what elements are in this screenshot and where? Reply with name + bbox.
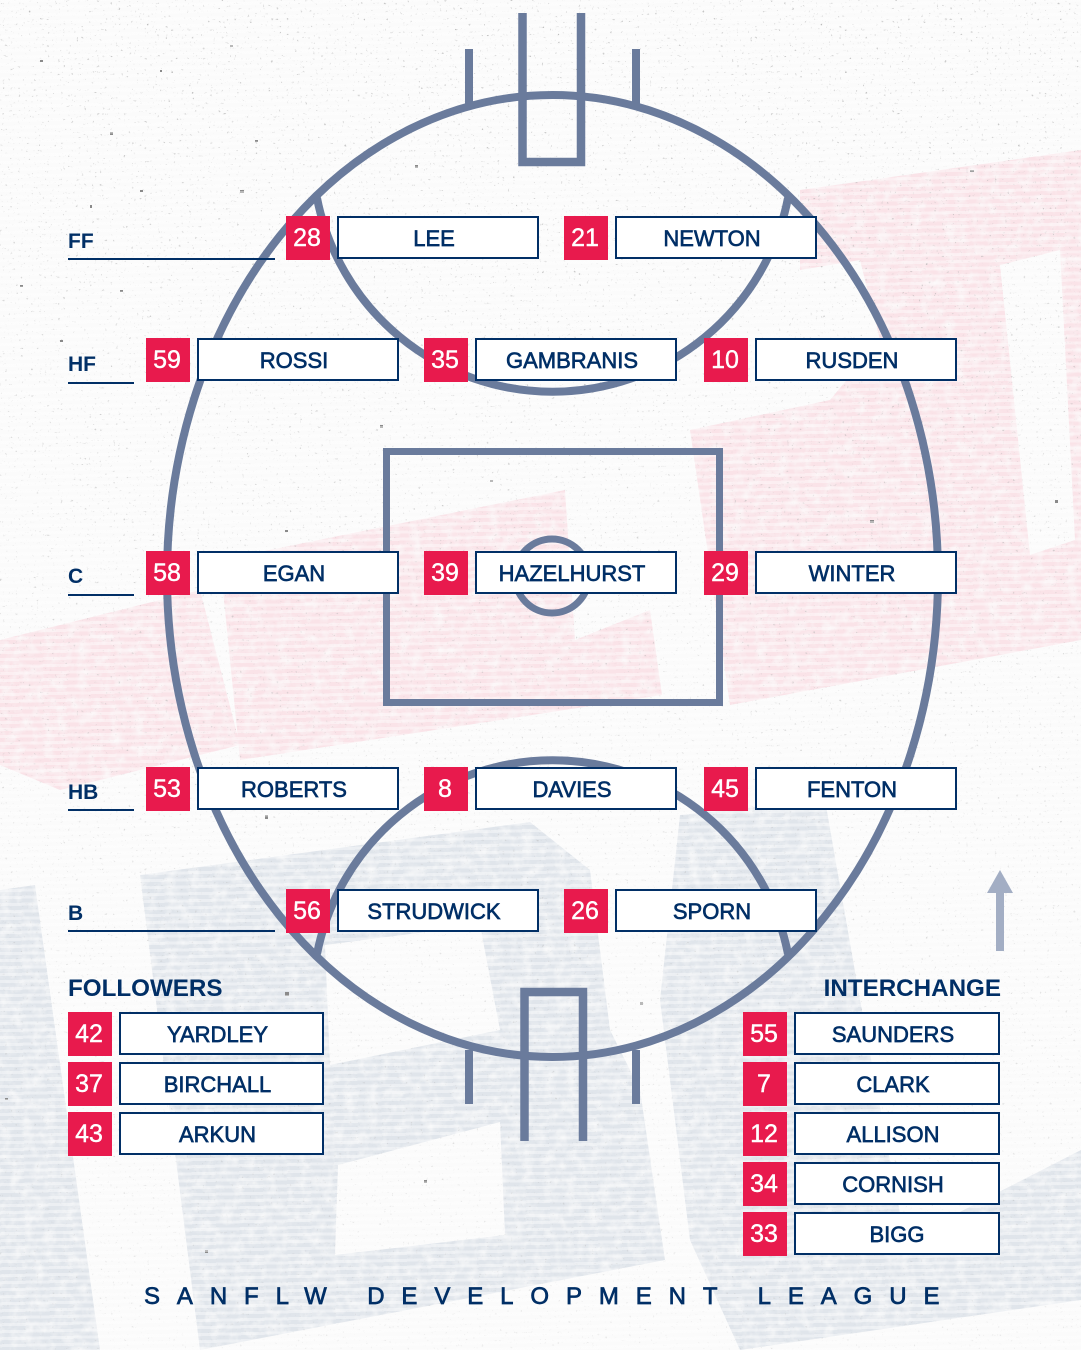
row: C: 58	[153, 559, 181, 587]
underline HF	[68, 382, 134, 384]
row: HF	[146, 338, 957, 382]
label: C: C	[68, 565, 83, 588]
interchange list: 55	[750, 1020, 778, 1048]
heading: interchange: INTERCHANGE	[824, 975, 1001, 1002]
top goal posts	[469, 13, 636, 162]
row: B: 26	[571, 897, 599, 925]
row: B: 56	[293, 897, 321, 925]
row: HB: 8	[438, 775, 452, 803]
forward 50 arc	[317, 198, 788, 392]
interchange list: SAUNDERS	[832, 1022, 954, 1047]
footer title: SANFLW DEVELOPMENT LEAGUE	[144, 1283, 956, 1310]
centre circle	[515, 539, 589, 613]
direction arrow	[987, 870, 1013, 951]
interchange list: ALLISON	[847, 1122, 939, 1147]
followers list: BIRCHALL	[164, 1072, 271, 1097]
row: C: WINTER	[809, 561, 895, 586]
followers list: YARDLEY	[167, 1022, 268, 1047]
row: B: SPORN	[673, 899, 751, 924]
bottom goal posts	[469, 992, 636, 1141]
label: HF: HF	[68, 353, 96, 376]
interchange list: 34	[750, 1170, 778, 1198]
followers list: 42	[75, 1020, 103, 1048]
underline FF	[68, 258, 275, 260]
interchange list: 33	[750, 1220, 778, 1248]
interchange list: CORNISH	[842, 1172, 944, 1197]
row: FF: 28	[293, 224, 321, 252]
followers list	[68, 1012, 324, 1156]
label: B: B	[68, 902, 83, 925]
underline HB	[68, 809, 134, 811]
label: FF: FF	[68, 230, 94, 253]
back 50 arc	[317, 760, 788, 954]
row: FF: 21	[571, 224, 599, 252]
row: FF	[286, 216, 817, 260]
interchange list	[743, 1012, 1000, 1256]
row: C: 39	[431, 559, 459, 587]
row: HF: RUSDEN	[806, 348, 898, 373]
row: HF: ROSSI	[260, 348, 328, 373]
underline B	[68, 930, 275, 932]
row: HF: 10	[711, 346, 739, 374]
row: HF: 59	[153, 346, 181, 374]
interchange list: BIGG	[869, 1222, 924, 1247]
row: C: HAZELHURST	[499, 561, 645, 586]
label: HB: HB	[68, 781, 98, 804]
followers list: 43	[75, 1120, 103, 1148]
row: HB	[146, 767, 957, 811]
centre square	[386, 452, 720, 702]
row: HB: DAVIES	[532, 777, 612, 802]
interchange list: CLARK	[856, 1072, 930, 1097]
row: C: 29	[711, 559, 739, 587]
interchange list: 12	[750, 1120, 778, 1148]
row: HF: GAMBRANIS	[506, 348, 638, 373]
heading: followers: FOLLOWERS	[68, 975, 223, 1002]
followers list: ARKUN	[179, 1122, 256, 1147]
row: B: STRUDWICK	[367, 899, 501, 924]
row: C	[146, 551, 957, 595]
underline C	[68, 594, 134, 596]
interchange list: 7	[757, 1070, 771, 1098]
row: C: EGAN	[263, 561, 325, 586]
row: HB: FENTON	[807, 777, 897, 802]
row: HB: 45	[711, 775, 739, 803]
row: HB: ROBERTS	[241, 777, 347, 802]
oval boundary	[167, 95, 938, 1057]
row: HB: 53	[153, 775, 181, 803]
row: HF: 35	[431, 346, 459, 374]
row: B	[286, 889, 817, 933]
followers list: 37	[75, 1070, 103, 1098]
row: FF: NEWTON	[663, 226, 761, 251]
row: FF: LEE	[413, 226, 455, 251]
